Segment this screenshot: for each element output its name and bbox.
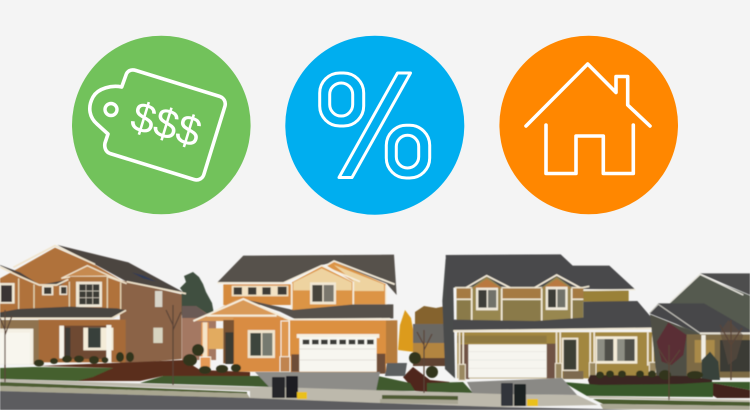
house 2 (centre) <box>193 255 397 374</box>
sidewalks and aprons <box>0 379 598 407</box>
dollar signs: $ <box>126 92 162 144</box>
roof and chimney <box>526 64 650 126</box>
ground: lawns, mulch, driveways, sidewalks, curbs and road <box>0 360 750 410</box>
house 4 (right) <box>649 273 750 380</box>
background trees and neighbouring house <box>177 272 446 366</box>
lawns <box>0 367 113 381</box>
house 1 (left) <box>0 245 186 364</box>
dollar signs <box>126 92 207 156</box>
icon: price tag on green circle <box>72 36 251 214</box>
bare street trees <box>0 305 742 400</box>
mulch beds <box>38 360 250 381</box>
curbs <box>0 386 250 398</box>
house 3 (right centre) <box>442 254 663 381</box>
shrubs along the foundations <box>34 344 703 380</box>
dollar signs: $ <box>148 98 184 149</box>
grass strips <box>0 382 247 394</box>
stone path <box>385 363 407 376</box>
photo: row of suburban houses <box>0 245 750 410</box>
icon: percent sign on blue circle <box>285 36 464 215</box>
tag outline <box>90 70 225 180</box>
road <box>0 391 640 410</box>
tag hole <box>105 104 117 116</box>
driveways <box>255 372 380 391</box>
dollar signs: $ <box>171 104 207 156</box>
trash bins and yellow recycling crate, centre <box>272 376 307 399</box>
icon: house on orange circle <box>499 36 678 214</box>
walls and door <box>546 125 633 174</box>
trash bins and yellow recycling crate, right <box>501 383 538 406</box>
